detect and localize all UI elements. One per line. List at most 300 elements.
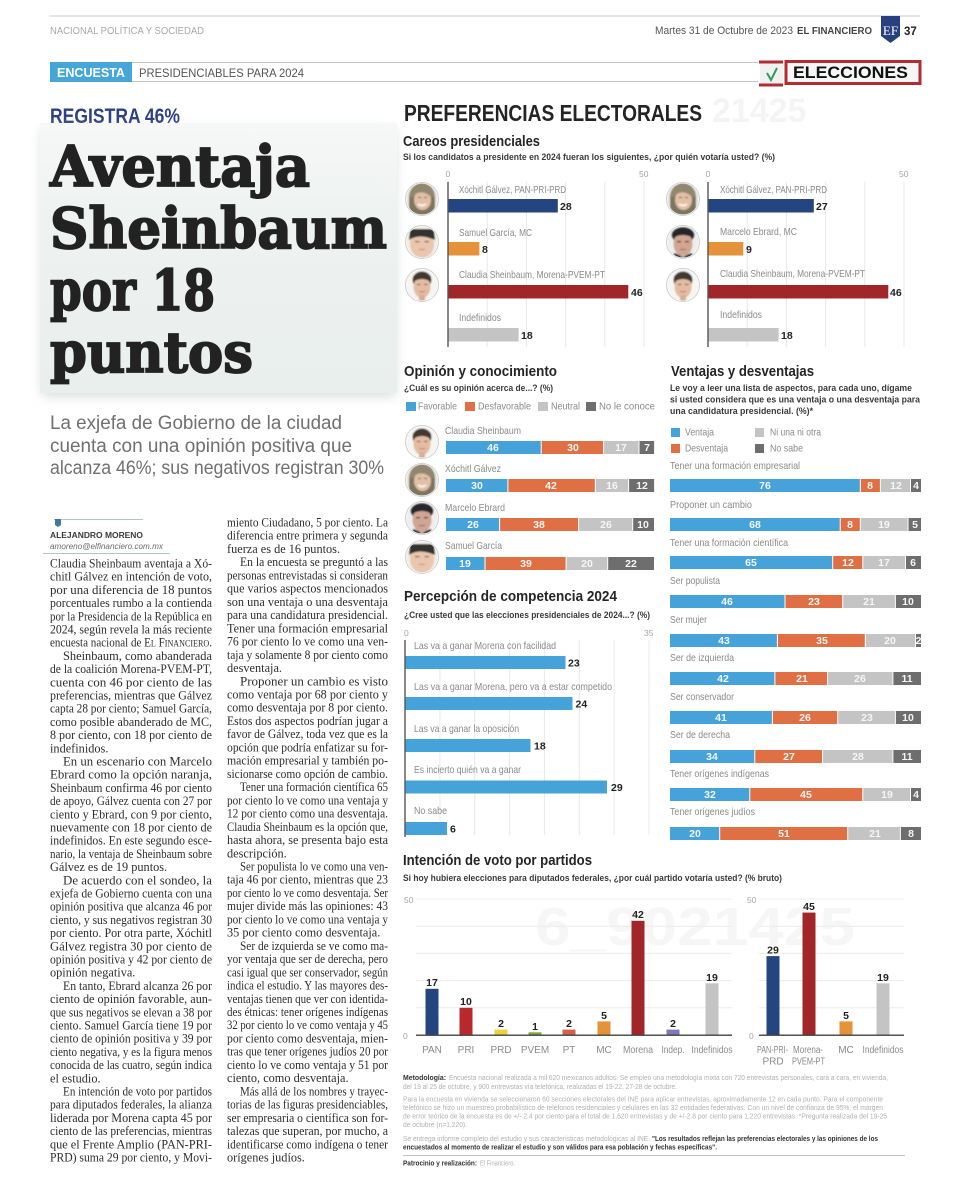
row: Xóchitl Gálvez: 12 <box>636 480 648 492</box>
bar chart: careo with Samuel García: Xóchitl Gálvez, PAN-PRI-PRD <box>459 185 566 196</box>
article column 1: 8 por ciento, con 18 por ciento de <box>50 728 213 742</box>
row: orígenes judíos: 20 <box>689 828 701 840</box>
question: una candidatura presidencial. (%)* <box>670 406 813 416</box>
row: Marcelo Ebrard: 26 <box>600 519 612 531</box>
methodology note: Metodología: <box>403 1073 446 1082</box>
column chart: all parties: 50 <box>404 895 414 905</box>
article column 1: ciento, y sus negativos registran 30 <box>50 913 212 927</box>
column chart: coalitions: PRD <box>762 1056 784 1068</box>
article column 1: indefinidos. <box>50 741 108 755</box>
row: ser mujer <box>670 615 922 647</box>
icon: check mark <box>759 62 783 85</box>
row: ser de derecha: 11 <box>901 751 913 763</box>
methodology note: Encuesta nacional realizada a mil 620 mexicanos adultos. Se empleó una metodología mixta con 720 entrevistas personales, cara a cara, en vivienda, <box>449 1073 888 1082</box>
article column 2: por ciento como desventaja, mien- <box>227 1032 388 1046</box>
row: Marcelo Ebrard: Marcelo Ebrard <box>445 503 505 514</box>
article column 2: taja 46 por ciento, mientras que 23 <box>227 873 388 887</box>
article column 1: En tanto, Ebrard alcanza 26 por <box>63 979 212 993</box>
heading: Percepción de competencia 2024 <box>404 588 618 605</box>
article column 2: diferencia entre primera y segunda <box>227 529 388 543</box>
column chart: coalitions: 19 <box>877 972 889 984</box>
column chart: coalitions: 5 <box>843 1010 849 1022</box>
article column 2: fuerza es de 16 puntos. <box>227 542 340 556</box>
row: Claudia Sheinbaum: 46 <box>487 442 499 454</box>
bar chart: 6 <box>450 824 456 836</box>
elecciones badge <box>786 62 920 84</box>
article column 2: ciento, como desventaja. <box>227 1071 349 1085</box>
row: ser populista: Ser populista <box>670 576 720 587</box>
subheading <box>50 412 384 479</box>
article column 2: para una candidatura presidencial. <box>227 608 388 622</box>
article column 2: talezas que superan, por mucho, a <box>227 1124 389 1138</box>
row: ser de izquierda: Ser de izquierda <box>670 653 734 664</box>
article column 1: que el Frente Amplio (PAN-PRI- <box>50 1137 212 1151</box>
column chart: all parties <box>403 895 732 1056</box>
row: ser mujer: Ser mujer <box>670 615 707 626</box>
row: formación empresarial: 8 <box>867 480 873 492</box>
row: Xóchitl Gálvez <box>406 464 654 496</box>
article column 2: 35 por ciento como desventaja. <box>227 926 380 940</box>
article column 1: por una diferencia de 18 puntos <box>50 583 212 597</box>
bar chart: careo with Samuel García: Claudia Sheinbaum, Morena-PVEM-PT <box>459 270 605 281</box>
row: ser mujer: 43 <box>718 635 730 647</box>
byline: amoreno@elfinanciero.com.mx <box>50 542 164 551</box>
tag: encuesta: ENCUESTA <box>57 66 125 80</box>
heading: Opinión y conocimiento <box>404 363 557 380</box>
column chart: all parties: 2 <box>670 1018 676 1030</box>
row: ser de izquierda: 21 <box>796 673 808 685</box>
article column 2: 76 por ciento lo ve como una ven- <box>227 635 388 649</box>
bar chart: 24 <box>576 698 587 710</box>
row: formación empresarial: Tener una formación empresarial <box>670 461 800 472</box>
article column 1: porcentuales rumbo a la contienda <box>50 596 213 610</box>
article column 1: ciento de opinión favorable, aun- <box>50 992 212 1006</box>
article column 2: sicionarse como opción de cambio. <box>227 767 388 781</box>
article column 1: Ebrard como la opción naranja, <box>50 768 212 782</box>
article column 2: como ventaja por 68 por ciento y <box>227 688 389 702</box>
article column 2: como desventaja por 8 por ciento. <box>227 701 388 715</box>
legend: Desfavorable <box>478 402 531 412</box>
newspaper name: EL FINANCIERO <box>797 26 872 37</box>
row: ser conservador: 23 <box>861 712 873 724</box>
bar chart: careo with Marcelo Ebrard: 0 <box>706 169 710 179</box>
row: formación científica <box>670 538 921 569</box>
byline <box>43 519 170 554</box>
row: ser populista: 10 <box>902 596 914 608</box>
article column 1: ciento. Samuel García tiene 19 por <box>50 1018 212 1032</box>
row: formación empresarial: 12 <box>890 480 902 492</box>
article column 1: Gálvez es de 19 puntos. <box>50 860 167 874</box>
article column 2: taja y solamente 8 por ciento como <box>227 648 388 662</box>
article column 1: ciento de las preferencias, mientras <box>50 1124 212 1138</box>
bar chart: careo with Marcelo Ebrard <box>666 169 909 347</box>
bar chart: Es incierto quién va a ganar <box>414 765 522 776</box>
article column 2: Proponer un cambio es visto <box>240 674 388 688</box>
article column 1: encuesta nacional de El Financiero. <box>50 636 212 650</box>
row: Claudia Sheinbaum: 30 <box>567 442 579 454</box>
article column 2: Ser de izquierda se ve como ma- <box>240 939 388 953</box>
article column 2: des étnicas: tener orígenes indígenas <box>227 1005 388 1019</box>
row: ser de derecha: 28 <box>852 751 864 763</box>
bar chart: careo with Marcelo Ebrard: Xóchitl Gálvez, PAN-PRI-PRD <box>720 185 827 196</box>
article column 2: hasta ahora, se presenta bajo esta <box>227 833 389 847</box>
bar chart: careo with Samuel García: Samuel García, MC <box>459 228 532 239</box>
bar chart: careo with Marcelo Ebrard: 50 <box>899 169 909 179</box>
article column 1: de la coalición Morena-PVEM-PT, <box>50 662 212 676</box>
row: orígenes indígenas: 4 <box>913 789 919 801</box>
row: Xóchitl Gálvez: 16 <box>606 480 618 492</box>
article column 1: Sheinbaum, como abanderada <box>63 649 213 663</box>
article column 1: ciento de opinión positiva y 39 por <box>50 1032 212 1046</box>
bar chart: Las va a ganar Morena con facilidad <box>414 641 556 652</box>
page header <box>50 16 920 43</box>
row: ser conservador: Ser conservador <box>670 692 735 703</box>
column chart: all parties: 2 <box>498 1018 504 1030</box>
avatar: Marcelo Ebrard <box>666 226 700 258</box>
methodology note: "Los resultados reflejan las preferencias electorales y las opiniones de los <box>652 1134 878 1143</box>
bar chart: 35 <box>644 628 654 638</box>
methodology note: El Financiero. <box>480 1158 515 1168</box>
column chart: all parties: Indefinidos <box>692 1045 732 1056</box>
watermark: 21425 <box>712 92 807 130</box>
title: Sheinbaum <box>50 196 387 262</box>
methodology note: Patrocinio y realización: <box>403 1158 477 1168</box>
article column 2: torias de las figuras presidenciables, <box>227 1098 388 1112</box>
column chart: all parties: PAN <box>422 1045 442 1056</box>
bar chart: 29 <box>611 782 623 794</box>
row: ser de izquierda: 26 <box>854 673 866 685</box>
article column 2: personas entrevistadas si consideran <box>227 568 388 582</box>
article column 1: nuevamente con 18 por ciento de <box>50 820 213 834</box>
article column 1: PRD) suma 29 por ciento, y Movi- <box>50 1150 212 1164</box>
row: Samuel García <box>406 540 654 574</box>
row: ser de izquierda <box>670 653 921 685</box>
question: Le voy a leer una lista de aspectos, para cada uno, dígame <box>670 383 912 393</box>
row: formación científica: 12 <box>842 557 854 569</box>
article column 1: cuenta con 46 por ciento de las <box>50 675 212 689</box>
bar chart: Las va a ganar Morena, pero va a estar competido <box>414 682 612 693</box>
watermark <box>535 92 855 957</box>
row: Marcelo Ebrard: 38 <box>533 519 545 531</box>
column chart: coalitions: MC <box>838 1045 854 1056</box>
row: ser de izquierda: 11 <box>901 673 913 685</box>
article column 2: desventaja. <box>227 661 282 675</box>
row: Samuel García: 20 <box>581 558 593 570</box>
column chart: all parties: PVEM <box>521 1045 549 1056</box>
row: proponer un cambio: 68 <box>749 519 761 531</box>
column chart: all parties: 17 <box>426 977 438 989</box>
row: Xóchitl Gálvez: 42 <box>545 480 557 492</box>
row: Xóchitl Gálvez: 30 <box>471 480 483 492</box>
main heading: preferencias electorales: PREFERENCIAS ELECTORALES <box>404 100 702 126</box>
article column 2: descripción. <box>227 846 287 860</box>
column chart: all parties: 1 <box>532 1021 538 1033</box>
row: formación científica: Tener una formación científica <box>670 538 788 549</box>
column chart: coalitions: 29 <box>767 944 779 956</box>
article column 2: que varios aspectos mencionados <box>227 582 388 596</box>
column chart: coalitions: 0 <box>749 1031 754 1041</box>
article column 2: 32 por ciento lo ve como ventaja y 45 <box>227 1018 388 1032</box>
column chart: all parties: 5 <box>601 1010 607 1022</box>
legend: Ventaja <box>685 428 714 438</box>
panel: opinión y conocimiento <box>404 363 655 574</box>
row: orígenes judíos: 21 <box>869 828 881 840</box>
bar chart <box>404 628 654 837</box>
row: ser de izquierda: 42 <box>717 673 729 685</box>
methodology note: Para la encuesta en vivienda se seleccionaron 60 secciones electorales del INE para aplicar entrevistas, aproximadamente 12 en cada punto. Para el componente <box>403 1094 883 1104</box>
article column 1: liderada por Morena capta 45 por <box>50 1111 212 1125</box>
article column 1: el estudio. <box>50 1071 101 1085</box>
row: ser de derecha <box>670 730 921 763</box>
row: ser conservador: 26 <box>799 712 811 724</box>
article column 2: 12 por ciento como una desventaja. <box>227 807 388 821</box>
bar chart: careo with Marcelo Ebrard: 9 <box>746 244 752 256</box>
article column 1: En intención de voto por partidos <box>63 1084 212 1098</box>
question: si usted considera que es una ventaja o una desventaja para <box>670 394 921 404</box>
row: ser populista: 21 <box>863 596 875 608</box>
bar chart: careo with Samuel García: 28 <box>560 201 572 213</box>
article column 1: para diputados federales, la alianza <box>50 1098 212 1112</box>
article column 2: tras que tener orígenes judíos 20 por <box>227 1045 388 1059</box>
question: ¿Cree usted que las elecciones presidenciales de 2024...? (%) <box>404 610 650 620</box>
row: orígenes judíos <box>670 807 921 840</box>
article column 2: Estos dos aspectos podrían jugar a <box>227 714 389 728</box>
methodology note: telefónico se hizo un muestreo probabilístico de teléfonos residenciales y celulares en las 32 entidades federativas. Con un nivel de confianza de 95%, el margen <box>403 1103 883 1112</box>
column chart: all parties: 2 <box>566 1018 572 1030</box>
article column 2: identificarse como indígena o tener <box>227 1137 388 1151</box>
article column 1: por la Presidencia de la República en <box>50 609 212 623</box>
column chart: coalitions: Indefinidos <box>862 1045 904 1056</box>
article column 1: nario, la ventaja de Sheinbaum sobre <box>50 847 212 861</box>
row: proponer un cambio: 8 <box>847 519 853 531</box>
row: proponer un cambio: 5 <box>912 519 918 531</box>
question: Si los candidatos a presidente en 2024 fueran los siguientes, ¿por quién votaría usted? (%) <box>403 152 775 162</box>
legend: Neutral <box>551 402 580 412</box>
methodology note: de error teórico de la encuesta es de +/- 2.4 por ciento para el total de 1,620 entrevistas y de +/-2.8 por ciento para 1,220 entrevistas. *Pregunta realizada del 19-25 <box>403 1112 887 1120</box>
row: ser conservador: 10 <box>902 712 914 724</box>
row: proponer un cambio: Proponer un cambio <box>670 500 752 511</box>
article column 1: indefinidos. En este segundo esce- <box>50 834 212 848</box>
article column 1: que sus negativos se elevan a 38 por <box>50 1005 212 1019</box>
title panel <box>40 123 397 396</box>
row: Claudia Sheinbaum <box>406 426 654 459</box>
row: ser populista: 23 <box>808 596 820 608</box>
article column 2: casi igual que ser conservador, según <box>227 965 388 979</box>
article column 2: Claudia Sheinbaum es la opción que, <box>227 820 388 834</box>
article column 2: por ciento lo ve como desventaja. Ser <box>227 886 388 900</box>
bar chart: careo with Marcelo Ebrard: 27 <box>816 201 828 213</box>
avatar: Claudia Sheinbaum <box>666 268 700 302</box>
row: orígenes judíos: Tener orígenes judíos <box>670 807 755 818</box>
legend <box>406 402 655 412</box>
legend: No le conoce <box>599 402 655 412</box>
methodology note: del 19 al 25 de octubre, y 900 entrevistas vía telefónica, realizadas el 19-22, 27-28 de octubre. <box>403 1082 677 1091</box>
row: Marcelo Ebrard: 10 <box>637 519 649 531</box>
row: Samuel García: 39 <box>520 558 532 570</box>
row: ser populista: 46 <box>721 596 733 608</box>
bar chart: careo with Samuel García: 0 <box>446 169 450 179</box>
title: Aventaja <box>49 134 310 200</box>
row: formación empresarial <box>670 461 921 492</box>
methodology note: de octubre (n=1,220). <box>403 1120 467 1129</box>
column chart: coalitions <box>747 895 904 1068</box>
article column 2: opción que podría enfatizar su for- <box>227 740 388 754</box>
row: ser mujer: 2 <box>916 635 922 647</box>
row: ser populista <box>670 576 921 608</box>
row: ser de derecha: 27 <box>783 751 795 763</box>
row: formación empresarial: 76 <box>759 480 771 492</box>
column chart: coalitions: Morena- <box>793 1045 823 1056</box>
bar chart: careo with Samuel García: 46 <box>631 287 643 299</box>
article column 2: miento Ciudadano, 5 por ciento. La <box>227 516 388 530</box>
row: orígenes indígenas: 19 <box>881 789 893 801</box>
legend: No sabe <box>770 444 803 454</box>
article column 2: Tener una formación científica 65 <box>240 780 388 794</box>
icon: EF shield <box>881 16 900 43</box>
article column 1: opinión positiva y 42 por ciento de <box>50 952 213 966</box>
article column 2: mujer divide más las opiniones: 43 <box>227 899 388 913</box>
bar chart: 0 <box>404 628 409 638</box>
byline: ALEJANDRO MORENO <box>50 530 143 540</box>
article column 2: por ciento lo ve como una ventaja y <box>227 912 389 926</box>
column chart: all parties: 0 <box>403 1031 408 1041</box>
row: orígenes judíos: 8 <box>908 828 914 840</box>
article column 2: ventajas tienen que ver con identida- <box>227 992 388 1006</box>
heading: Intención de voto por partidos <box>403 852 592 869</box>
article column 2: ciento lo ve como ventaja y 51 por <box>227 1058 388 1072</box>
article column 1: exjefa de Gobierno cuenta con una <box>50 886 213 900</box>
bar chart: careo with Samuel García: 8 <box>482 244 488 256</box>
page number: 37 <box>904 26 917 38</box>
row: ser conservador: 41 <box>715 712 727 724</box>
title <box>49 134 387 386</box>
question <box>670 383 921 416</box>
row: proponer un cambio: 19 <box>878 519 890 531</box>
article column 1 <box>50 556 213 1164</box>
article column 2 <box>227 516 389 1165</box>
legend: Favorable <box>418 402 457 412</box>
row: Samuel García: 22 <box>625 558 637 570</box>
row: orígenes indígenas <box>670 769 921 801</box>
title: puntos <box>50 320 253 386</box>
panel: ventajas y desventajas <box>670 363 922 840</box>
row: proponer un cambio <box>670 500 921 531</box>
bar chart: careo with Marcelo Ebrard: Claudia Sheinbaum, Morena-PVEM-PT <box>720 269 865 280</box>
article column 2: orígenes judíos. <box>227 1151 305 1165</box>
heading: Ventajas y desventajas <box>671 363 814 380</box>
article column 2: Más allá de los nombres y trayec- <box>240 1084 388 1098</box>
column chart: all parties: 42 <box>632 909 644 921</box>
row: orígenes indígenas: 45 <box>800 789 812 801</box>
article column 2: Ser populista lo ve como una ven- <box>240 860 388 874</box>
title: por 18 <box>50 258 215 324</box>
question: ¿Cuál es su opinión acerca de...? (%) <box>404 383 553 393</box>
column chart: all parties: MC <box>596 1045 612 1056</box>
article column 1: En un escenario con Marcelo <box>63 754 212 768</box>
row: ser mujer: 35 <box>816 635 828 647</box>
row: ser mujer: 20 <box>884 635 896 647</box>
panel: careos presidenciales <box>403 133 909 347</box>
column chart: all parties: Indep. <box>662 1045 684 1056</box>
bar chart: careo with Marcelo Ebrard: Indefinidos <box>720 310 762 321</box>
legend: Ni una ni otra <box>770 428 821 438</box>
legend: Desventaja <box>685 444 728 454</box>
bar chart: careo with Marcelo Ebrard: 18 <box>781 330 793 342</box>
bar chart: careo with Samuel García: 50 <box>639 169 649 179</box>
article column 2: yor ventaja que ser de derecha, pero <box>227 952 388 966</box>
column chart: coalitions: 45 <box>803 901 815 913</box>
row: formación empresarial: 4 <box>913 480 919 492</box>
article column 1: opinión negativa. <box>50 966 135 980</box>
date: Martes 31 de Octubre de 2023 <box>655 25 793 37</box>
subheading: La exjefa de Gobierno de la ciudad <box>50 412 342 434</box>
column chart: coalitions: PAN-PRI- <box>757 1045 788 1056</box>
row: Marcelo Ebrard: 26 <box>467 519 479 531</box>
article column 1: ciento y Ebrard, con 9 por ciento, <box>50 807 212 821</box>
article column 2: por ciento lo ve como una ventaja y <box>227 793 389 807</box>
panel: intención de voto por partidos <box>403 852 904 1068</box>
article column 1: 2024, según revela la más reciente <box>50 622 213 636</box>
panel: percepción de competencia <box>404 588 654 837</box>
section bar <box>50 62 920 85</box>
article column 1: Sheinbaum confirma 46 por ciento <box>50 781 212 795</box>
section subject: PRESIDENCIABLES PARA 2024 <box>139 66 304 80</box>
row: formación científica: 6 <box>910 557 916 569</box>
row: Claudia Sheinbaum: Claudia Sheinbaum <box>445 426 521 437</box>
article column 2: Tener una formación empresarial <box>227 621 389 635</box>
article column 1: chitl Gálvez en intención de voto, <box>50 570 212 584</box>
article column 1: ciento negativa, y es la figura menos <box>50 1045 212 1059</box>
column chart: all parties: PRI <box>458 1045 474 1056</box>
bar chart: careo with Samuel García <box>406 169 649 347</box>
article column 1: preferencias, mientras que Gálvez <box>50 688 213 702</box>
article column 1: opinión positiva que alcanza 46 por <box>50 900 212 914</box>
column chart: coalitions: 50 <box>747 895 757 905</box>
article column 1: De acuerdo con el sondeo, la <box>63 873 213 887</box>
bar chart: 23 <box>568 658 580 670</box>
row: orígenes judíos: 51 <box>778 828 790 840</box>
methodology note: encuestados al momento de realizar el estudio y son válidos para esa población y fechas específicas". <box>403 1142 717 1152</box>
section label: NACIONAL POLÍTICA Y SOCIEDAD <box>50 24 204 37</box>
subheading: alcanza 46%; sus negativos registran 30% <box>50 457 384 479</box>
row: orígenes indígenas: 32 <box>704 789 716 801</box>
kicker: REGISTRA 46% <box>50 105 180 128</box>
row: ser de derecha: 34 <box>706 751 718 763</box>
heading: Careos presidenciales <box>403 133 540 150</box>
bar chart: Las va a ganar la oposición <box>414 724 519 735</box>
article column 1: de apoyo, Gálvez cuenta con 27 por <box>50 794 212 808</box>
article column 2: mación empresarial y también po- <box>227 754 388 768</box>
bar chart: 18 <box>534 740 546 752</box>
bar chart: careo with Marcelo Ebrard: 46 <box>890 287 902 299</box>
article column 1: Gálvez registra 30 por ciento de <box>50 939 213 953</box>
row: Marcelo Ebrard <box>406 502 654 534</box>
column chart: all parties: PRD <box>490 1045 512 1056</box>
article column 2: ser empresaria o científica son for- <box>227 1111 388 1125</box>
bar chart: careo with Marcelo Ebrard: Marcelo Ebrard, MC <box>720 227 797 238</box>
methodology note: Se entrega informe completo del estudio y sus características metodológicas al INE. <box>403 1134 650 1143</box>
avatar: Xóchitl Gálvez <box>666 182 700 216</box>
row: formación científica: 17 <box>878 557 890 569</box>
methodology note <box>403 1073 905 1168</box>
article column 1: como posible abanderado de MC, <box>50 715 212 729</box>
avatar: Samuel García <box>406 226 438 258</box>
avatar: Claudia Sheinbaum <box>406 268 438 302</box>
column chart: all parties: 19 <box>706 972 718 984</box>
row: Samuel García: 19 <box>459 558 471 570</box>
avatar: Xóchitl Gálvez <box>406 182 438 216</box>
icon: EF shield: EF <box>883 23 898 38</box>
